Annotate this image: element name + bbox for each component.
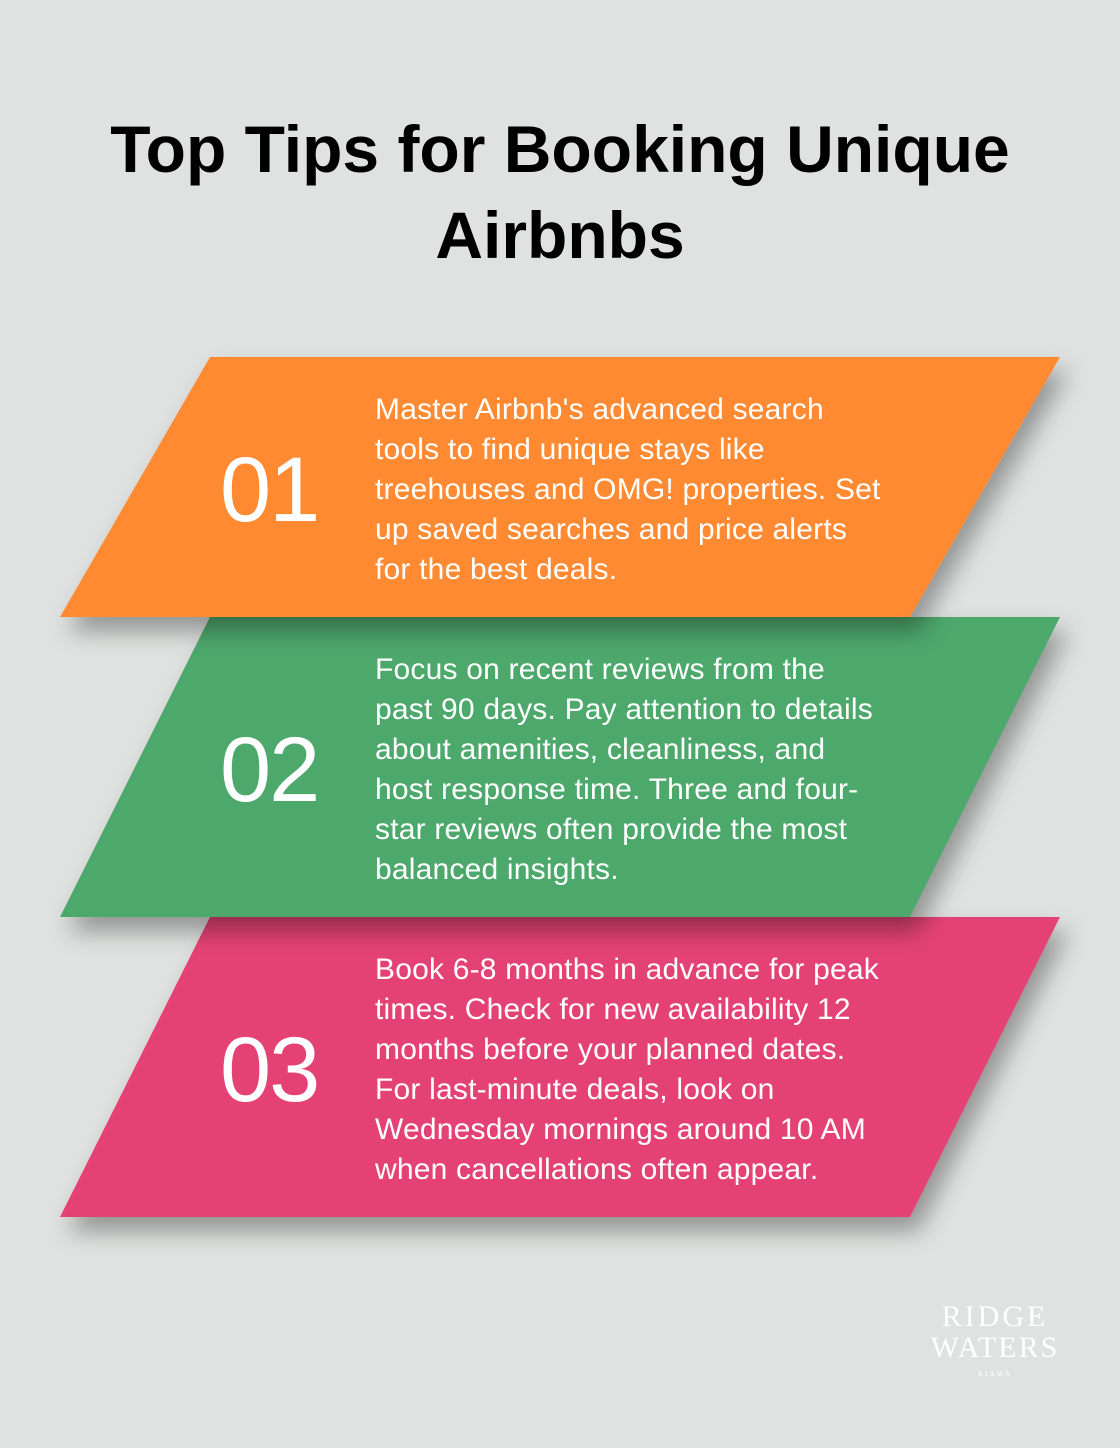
panel 2 text: star reviews often provide the most (375, 813, 847, 846)
panel 1 text: up saved searches and price alerts (375, 513, 847, 546)
panel 1 shape (60, 357, 1060, 617)
panel 3 number: 03 (220, 1019, 318, 1121)
panel 3 text: times. Check for new availability 12 (375, 993, 851, 1026)
panel 3 text: For last-minute deals, look on (375, 1073, 775, 1106)
panel 3 text: Wednesday mornings around 10 AM (375, 1113, 866, 1146)
panel 2 number: 02 (220, 719, 318, 821)
logo (930, 1300, 1059, 1378)
panel 2 text: Focus on recent reviews from the (375, 653, 825, 686)
panel 2 text (375, 653, 873, 886)
panel 1 text: tools to find unique stays like (375, 433, 765, 466)
panel 3 text: when cancellations often appear. (375, 1153, 818, 1186)
panel 1 text: for the best deals. (375, 553, 617, 586)
logo: KIAMA (978, 1370, 1012, 1378)
panel 1 number: 01 (220, 439, 318, 541)
panel 1 text: Master Airbnb's advanced search (375, 393, 824, 426)
logo: RIDGE (942, 1300, 1048, 1333)
title (110, 112, 1010, 272)
title: Top Tips for Booking Unique (110, 112, 1010, 186)
panel 3 text: months before your planned dates. (375, 1033, 845, 1066)
panel 3 shape (60, 917, 1060, 1217)
panel 3 text (375, 953, 879, 1186)
panel 3 text: Book 6-8 months in advance for peak (375, 953, 879, 986)
panel 2 text: balanced insights. (375, 853, 619, 886)
panel 1 text: treehouses and OMG! properties. Set (375, 473, 881, 506)
panel 2 text: past 90 days. Pay attention to details (375, 693, 873, 726)
title: Airbnbs (435, 198, 685, 272)
logo: WATERS (931, 1331, 1059, 1364)
panel 2 shape (60, 617, 1060, 917)
panel 2 text: host response time. Three and four- (375, 773, 858, 806)
panel 1 text (375, 393, 881, 586)
panel 2 text: about amenities, cleanliness, and (375, 733, 825, 766)
